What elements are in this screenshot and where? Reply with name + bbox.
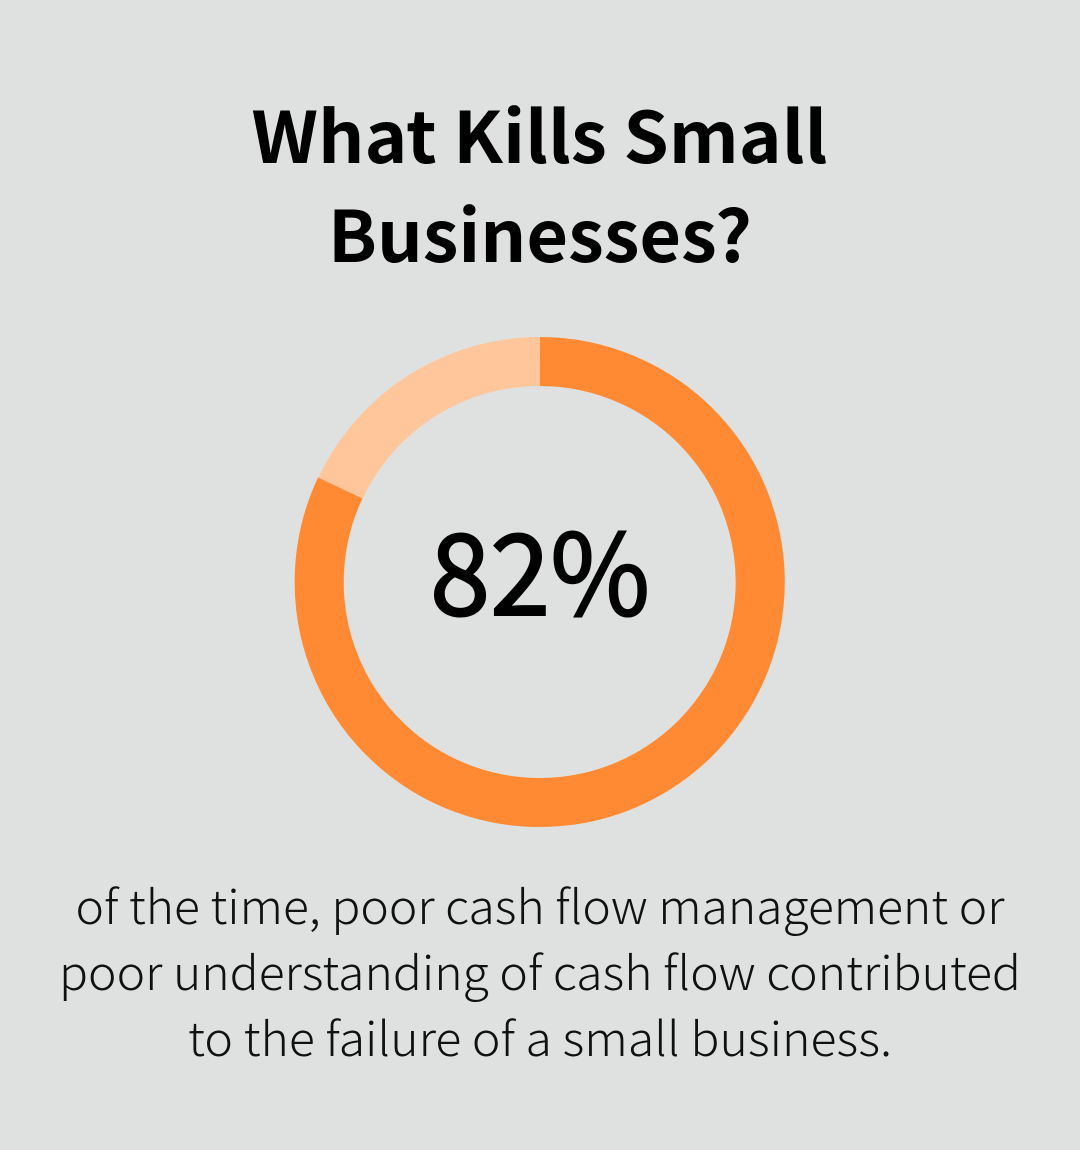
center value: 82% [430, 486, 650, 648]
description text: poor understanding of cash flow contributed [59, 935, 1021, 1004]
title: What Kills Small [252, 82, 828, 184]
title [252, 82, 828, 283]
title: Businesses? [328, 181, 752, 283]
donut chart: 82% [319, 362, 760, 802]
description text: to the failure of a small business. [188, 1001, 892, 1070]
description text [59, 869, 1021, 1070]
description text: of the time, poor cash flow management or [76, 869, 1005, 938]
